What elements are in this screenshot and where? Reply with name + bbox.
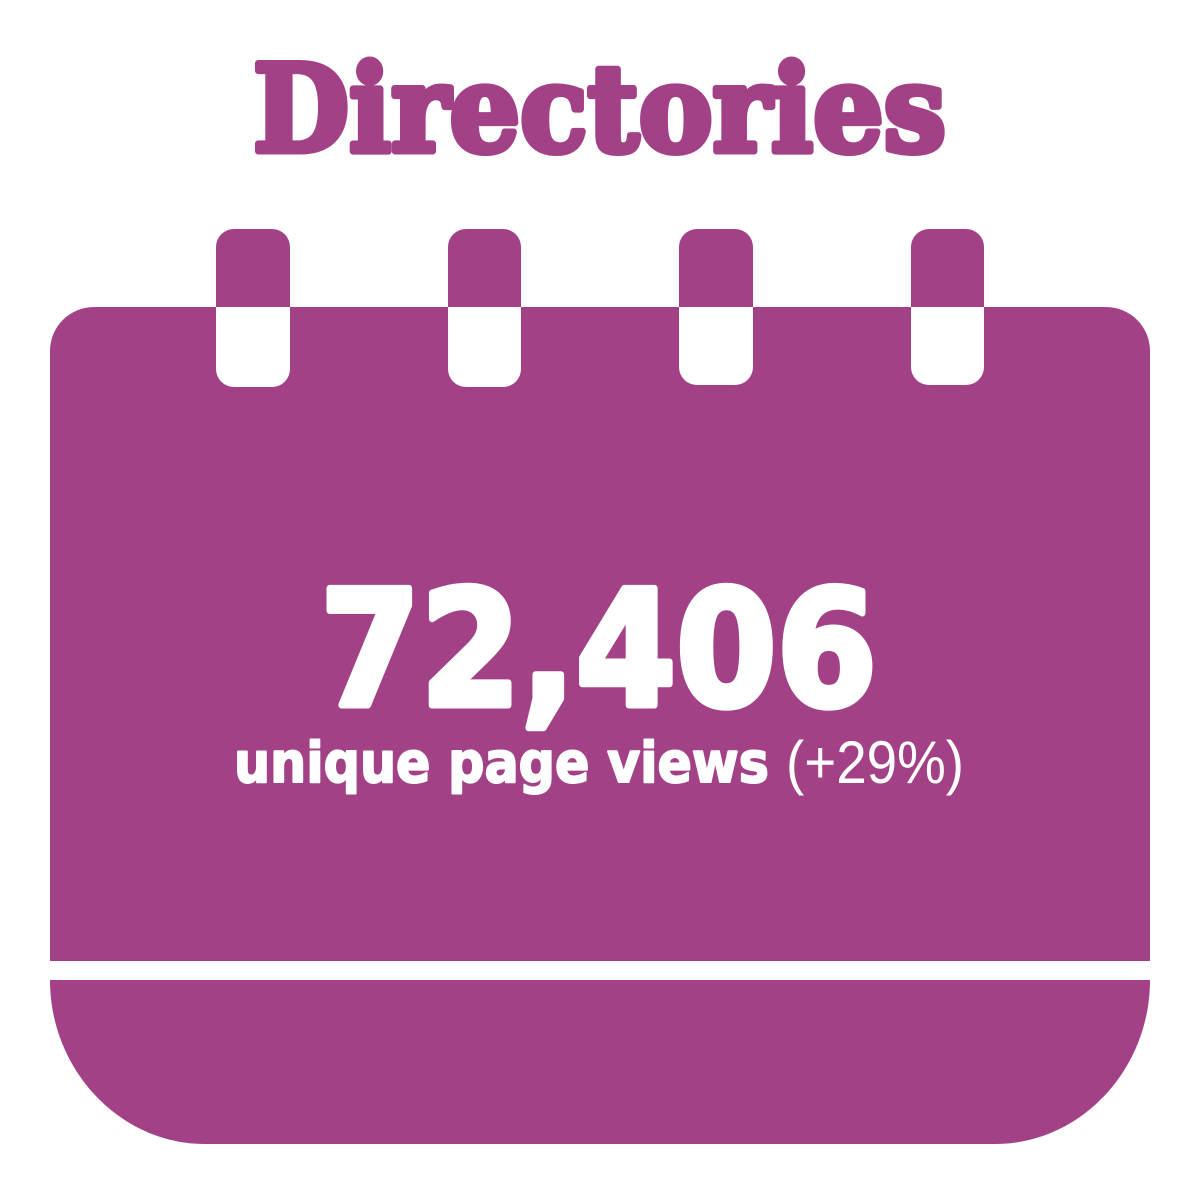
calendar body bbox=[50, 307, 1150, 961]
big number: 72,406 bbox=[320, 556, 877, 743]
calendar icon bbox=[50, 229, 1150, 1144]
binding ring 2 bbox=[448, 229, 521, 387]
subtitle bbox=[234, 729, 964, 796]
binding ring 1 bbox=[216, 229, 290, 387]
binding ring 4 bbox=[911, 229, 984, 385]
subtitle change percentage: (+29%) bbox=[786, 729, 964, 796]
binding ring 3 bbox=[679, 229, 753, 385]
subtitle bold part: unique page views bbox=[234, 731, 769, 796]
title: Directories bbox=[253, 39, 946, 180]
calendar footer bbox=[50, 980, 1150, 1144]
